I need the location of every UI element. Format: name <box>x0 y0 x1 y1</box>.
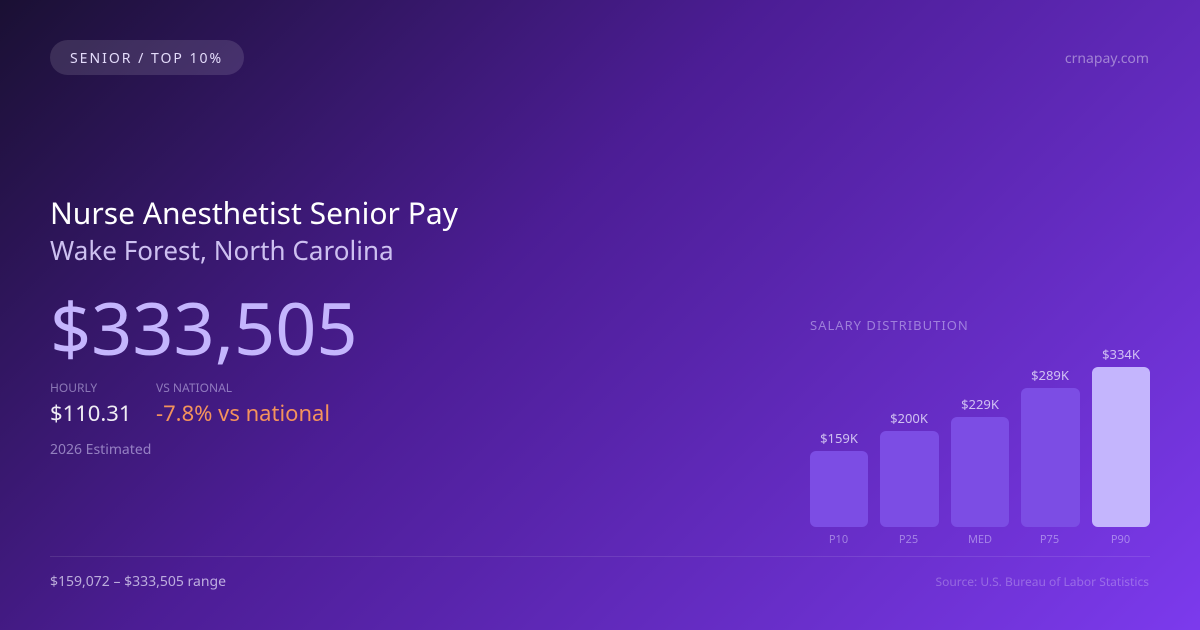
stat: hourly: HOURLY <box>50 379 97 396</box>
stat: vs national <box>156 379 330 428</box>
title: Nurse Anesthetist Senior Pay <box>50 192 458 233</box>
bar P25 <box>880 409 939 546</box>
source note: Source: U.S. Bureau of Labor Statistics <box>936 573 1149 590</box>
stat: vs national: -7.8% vs national <box>156 398 330 428</box>
stat: hourly <box>50 379 131 428</box>
bar P10: P10 <box>829 532 848 546</box>
main salary figure: $333,505 <box>50 279 358 377</box>
badge: senior / top 10% <box>50 40 244 75</box>
bar P90: $334K <box>1102 345 1140 363</box>
bar P75 <box>1021 366 1080 546</box>
bar P10: $159K <box>820 429 858 447</box>
chart heading: SALARY DISTRIBUTION <box>810 316 969 334</box>
stat: hourly: $110.31 <box>50 398 131 428</box>
bar P90: P90 <box>1111 532 1130 546</box>
bar P75: $289K <box>1031 366 1069 384</box>
bar MED: $229K <box>961 395 999 413</box>
bar MED <box>951 395 1009 546</box>
bar chart: salary distribution <box>810 316 1150 546</box>
location subtitle: Wake Forest, North Carolina <box>50 232 394 268</box>
bar MED: MED <box>968 532 992 546</box>
estimate note: 2026 Estimated <box>50 440 151 459</box>
bar P25: $200K <box>890 409 928 427</box>
bar P25: P25 <box>899 532 918 546</box>
salary range: $159,072 – $333,505 range <box>50 572 226 591</box>
bar P90 <box>1092 345 1150 546</box>
bar P10 <box>810 429 868 546</box>
stat: vs national: VS NATIONAL <box>156 379 232 396</box>
badge: senior / top 10%: SENIOR / TOP 10% <box>70 49 223 68</box>
site name: crnapay.com <box>1065 49 1149 68</box>
bar P75: P75 <box>1040 532 1059 546</box>
